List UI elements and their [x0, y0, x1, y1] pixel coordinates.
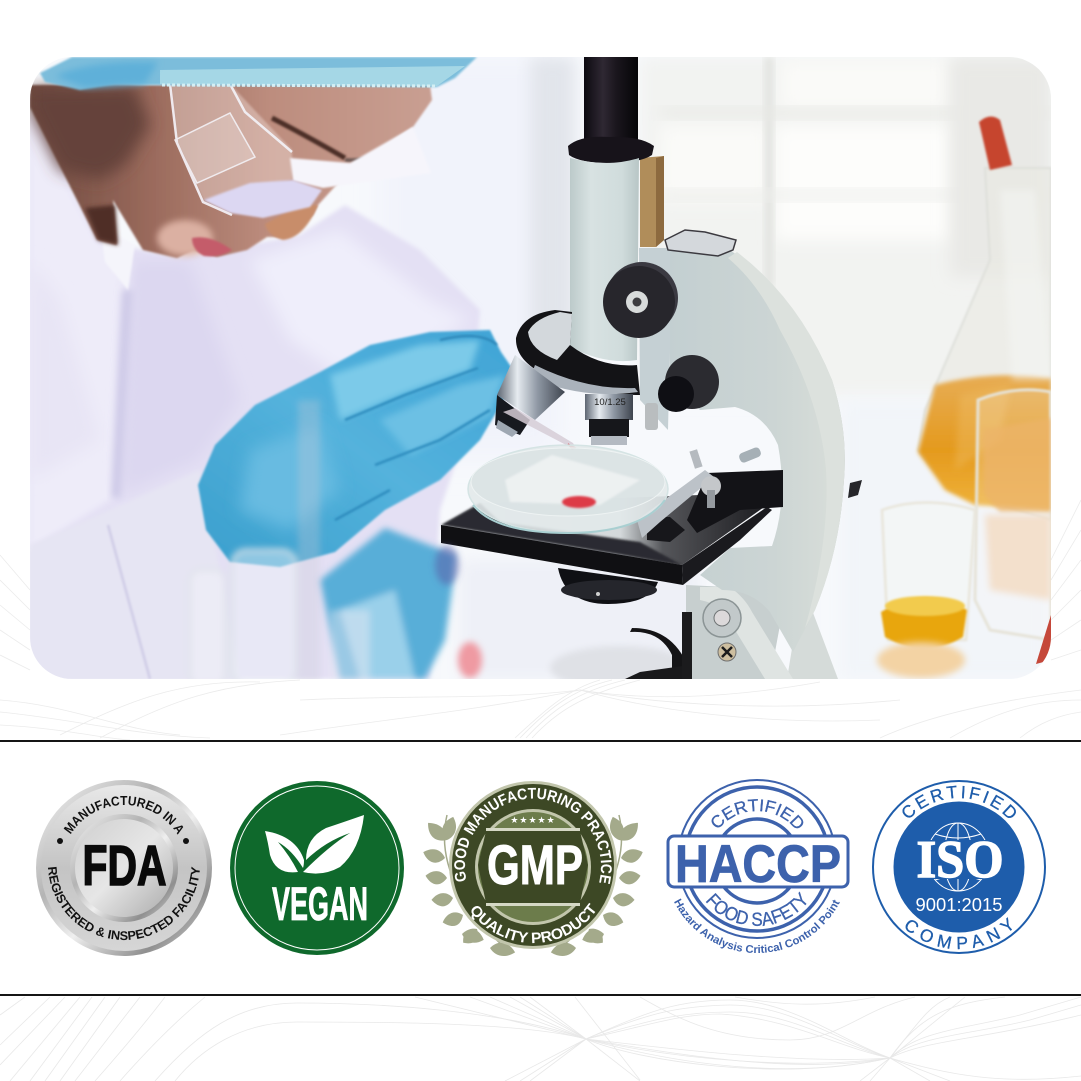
badge: HACCP food safety: HACCP	[675, 835, 841, 894]
microscope	[441, 57, 862, 679]
badge: FDA registered facility: REGISTERED & INSPECTED FACILITY	[48, 866, 200, 940]
badge: HACCP food safety: CERTIFIED	[712, 799, 804, 828]
coarse focus knob	[603, 262, 678, 338]
laurel right	[550, 815, 645, 958]
room background	[342, 57, 1051, 679]
badge: GMP with laurels: GOOD MANUFACTURING PRACTICE	[454, 788, 612, 884]
badge: GMP with laurels	[423, 781, 643, 956]
lower blue glove	[320, 528, 455, 679]
objective lens left	[495, 355, 565, 437]
photo: scientist at microscope	[30, 57, 1051, 690]
badge: GMP with laurels: GMP	[487, 833, 583, 896]
badge: ISO 9001:2015: CERTIFIED	[902, 786, 1016, 818]
badge: HACCP food safety	[666, 779, 850, 953]
lab coat	[30, 110, 480, 679]
badge: vegan: VEGAN	[272, 877, 368, 930]
badge: ISO 9001:2015: ISO	[916, 831, 1004, 889]
objective lens centre	[585, 394, 633, 445]
petri dish with red sample	[468, 445, 668, 533]
objective lens centre: 10/1.25	[594, 397, 626, 408]
base and back leg	[787, 610, 838, 679]
stage top, front and side edges	[441, 480, 862, 585]
glass beaker with amber liquid	[975, 390, 1051, 640]
brass rack	[640, 156, 664, 247]
hair net	[40, 57, 477, 90]
section divider top	[0, 740, 1081, 742]
badge: HACCP food safety: FOOD SAFETY	[706, 892, 806, 926]
arm	[668, 250, 845, 652]
badge: ISO 9001:2015: COMPANY	[906, 917, 1012, 950]
upper blue glove	[198, 330, 512, 567]
fine focus knob	[645, 355, 719, 430]
background wave pattern: upper band	[0, 500, 1081, 740]
badge: ISO 9001:2015	[872, 780, 1046, 954]
orange erlenmeyer flask	[918, 116, 1051, 520]
badge: FDA registered facility	[36, 780, 212, 956]
red blurred object	[435, 545, 482, 678]
safety goggles	[170, 84, 431, 218]
pillar	[686, 585, 780, 679]
focus slide plate	[639, 248, 670, 430]
badge: GMP with laurels: ★★★★★	[510, 815, 556, 825]
pipette	[503, 408, 574, 444]
black collar	[568, 137, 654, 163]
mirror screw plate	[703, 599, 741, 661]
badge: ISO 9001:2015: 9001:2015	[916, 895, 1002, 915]
main body column	[570, 158, 639, 361]
icon: wire globe	[912, 823, 1008, 891]
badge: HACCP food safety: Hazard Analysis Critical Control Point	[674, 898, 840, 953]
black eyepiece tube	[584, 57, 638, 141]
background wave pattern: lower band	[0, 997, 1081, 1081]
top plate	[665, 230, 736, 256]
mechanical stage slide holder	[637, 446, 783, 542]
badge: vegan	[230, 781, 404, 955]
icon: vegan leaves	[265, 815, 364, 874]
badge: GMP with laurels: QUALITY PRODUCT	[471, 902, 596, 944]
foreground glass test tubes	[228, 398, 372, 679]
lips	[192, 237, 232, 256]
face and neck	[30, 85, 432, 258]
badge: FDA registered facility: FDA	[82, 834, 166, 898]
small beaker with yellow oil	[877, 502, 975, 678]
laurel left	[421, 815, 516, 958]
condenser under stage	[558, 568, 658, 604]
red blurred item at right edge	[1036, 615, 1051, 664]
revolving nosepiece	[516, 310, 640, 395]
badge: FDA registered facility: MANUFACTURED IN A	[64, 796, 184, 835]
section divider bottom	[0, 994, 1081, 996]
